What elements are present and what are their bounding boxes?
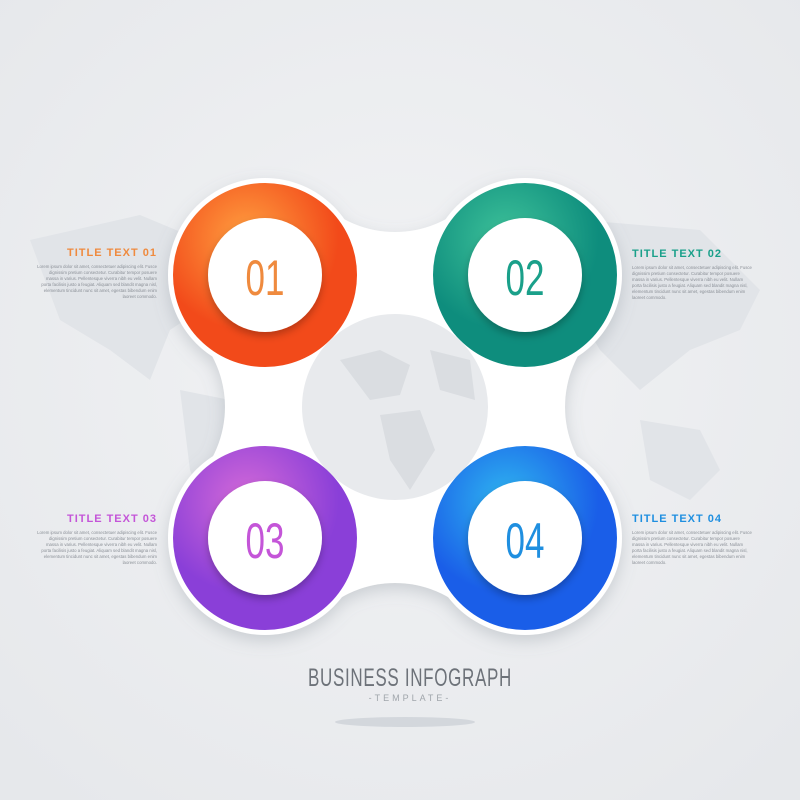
circle 03: 03 <box>246 514 284 570</box>
circle 01: 01 <box>246 251 284 307</box>
text: Lorem ipsum dolor sit amet, consectetuer adipiscing elit. Fusce dignissim pretium consectetur. Curabitur tempor posuere massa in varius. Pellentesque viverra nibh eu velit. Nullam porta facilisis justo a feugiat. Aliquam sed blandit magna nisl, elementum tincidunt nunc sit amet, egestas bibendum enim laoreet commodo. <box>37 530 157 565</box>
white connector shape <box>168 178 622 635</box>
footer title: -TEMPLATE- <box>369 693 451 703</box>
footer title: BUSINESS INFOGRAPH <box>308 664 512 692</box>
text 01 <box>37 247 157 299</box>
circle 03 <box>173 446 357 630</box>
circle 01 <box>173 183 357 367</box>
text 02 <box>632 248 752 300</box>
bottom shadow <box>335 717 475 727</box>
text: Lorem ipsum dolor sit amet, consectetuer adipiscing elit. Fusce dignissim pretium consectetur. Curabitur tempor posuere massa in varius. Pellentesque viverra nibh eu velit. Nullam porta facilisis justo a feugiat. Aliquam sed blandit magna nisl, elementum tincidunt nunc sit amet, egestas bibendum enim laoreet commodo. <box>632 530 752 565</box>
circle 04: 04 <box>506 514 544 570</box>
circle 02: 02 <box>506 251 544 307</box>
circle 04 <box>433 446 617 630</box>
text: TITLE TEXT 04 <box>632 513 722 525</box>
text: TITLE TEXT 03 <box>67 513 157 525</box>
text: Lorem ipsum dolor sit amet, consectetuer adipiscing elit. Fusce dignissim pretium consectetur. Curabitur tempor posuere massa in varius. Pellentesque viverra nibh eu velit. Nullam porta facilisis justo a feugiat. Aliquam sed blandit magna nisl, elementum tincidunt nunc sit amet, egestas bibendum enim laoreet commodo. <box>632 265 752 300</box>
world map <box>30 215 760 520</box>
text: Lorem ipsum dolor sit amet, consectetuer adipiscing elit. Fusce dignissim pretium consectetur. Curabitur tempor posuere massa in varius. Pellentesque viverra nibh eu velit. Nullam porta facilisis justo a feugiat. Aliquam sed blandit magna nisl, elementum tincidunt nunc sit amet, egestas bibendum enim laoreet commodo. <box>37 264 157 299</box>
map and diagram <box>30 178 760 727</box>
circle 02 <box>433 183 617 367</box>
text: TITLE TEXT 01 <box>67 247 157 259</box>
center hole with map <box>302 314 488 500</box>
text 04 <box>632 513 752 565</box>
text: TITLE TEXT 02 <box>632 248 722 260</box>
text 03 <box>37 513 157 565</box>
